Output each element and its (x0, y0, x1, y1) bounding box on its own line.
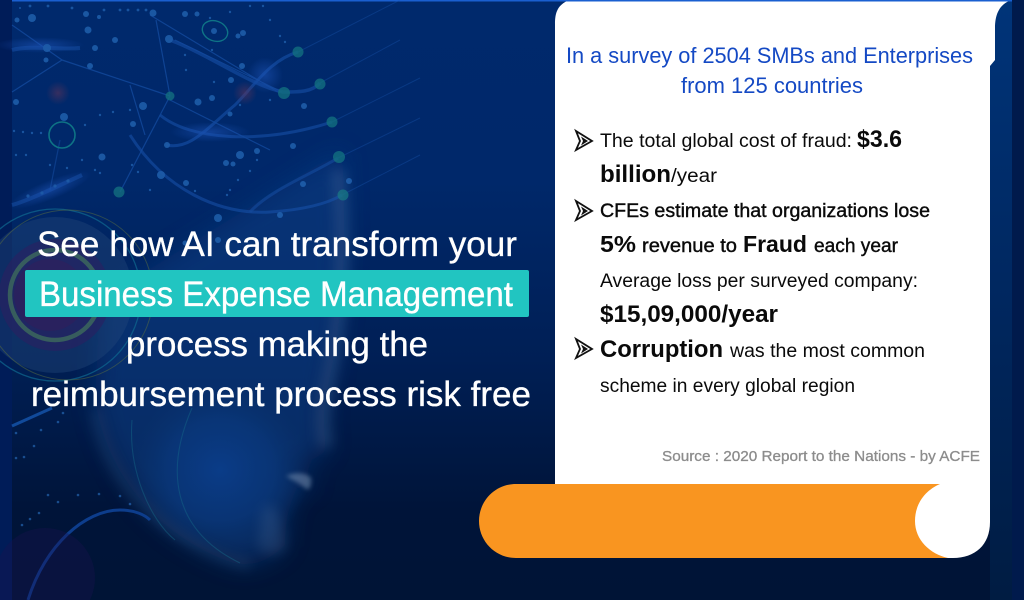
icon: bullet arrow (576, 131, 592, 150)
icon: bullet arrow (576, 339, 592, 358)
stat: global cost of fraud: billion (600, 161, 671, 188)
stat: revenue lost to fraud: each year (814, 236, 899, 257)
stat: global cost of fraud: $3.6 (857, 126, 902, 153)
illustration: neural network lines and dots (0, 0, 420, 526)
stat: revenue lost to fraud: revenue to (642, 236, 737, 257)
stat: average loss per company: Average loss per surveyed company: (600, 271, 918, 292)
stat: global cost of fraud (600, 126, 902, 188)
stat: global cost of fraud: /year (671, 166, 718, 187)
stat: revenue lost to fraud (600, 201, 930, 257)
survey heading (566, 43, 973, 98)
stat: corruption: scheme in every global region (600, 376, 855, 397)
headline (25, 225, 531, 414)
icon: bullet arrow (576, 201, 592, 220)
source note: Source : 2020 Report to the Nations - by ACFE (662, 448, 980, 465)
stat: corruption (600, 336, 925, 397)
headline: reimbursement process risk free (31, 375, 531, 414)
illustration: concentric rings (0, 209, 153, 381)
stat: revenue lost to fraud: Fraud (743, 231, 807, 257)
headline: See how AI can transform your (37, 225, 517, 264)
stat: corruption: Corruption (600, 336, 723, 363)
stat: average loss per company: $15,09,000/year (600, 301, 778, 328)
stat: corruption: was the most common (729, 341, 925, 362)
survey heading: In a survey of 2504 SMBs and Enterprises (566, 43, 973, 68)
stat: average loss per company (600, 271, 918, 328)
panel: survey card (555, 2, 1008, 558)
stat: revenue lost to fraud: 5% (600, 231, 636, 257)
stat: global cost of fraud: The total global cost of fraud: (600, 131, 852, 152)
illustration: AI head silhouette (0, 150, 344, 600)
survey heading: from 125 countries (681, 73, 863, 98)
stat: revenue lost to fraud: CFEs estimate that organizations lose (600, 201, 930, 222)
headline: process making the (126, 325, 428, 364)
highlight bar: Business Expense Management (39, 275, 513, 314)
orange scroll bar (479, 484, 948, 558)
